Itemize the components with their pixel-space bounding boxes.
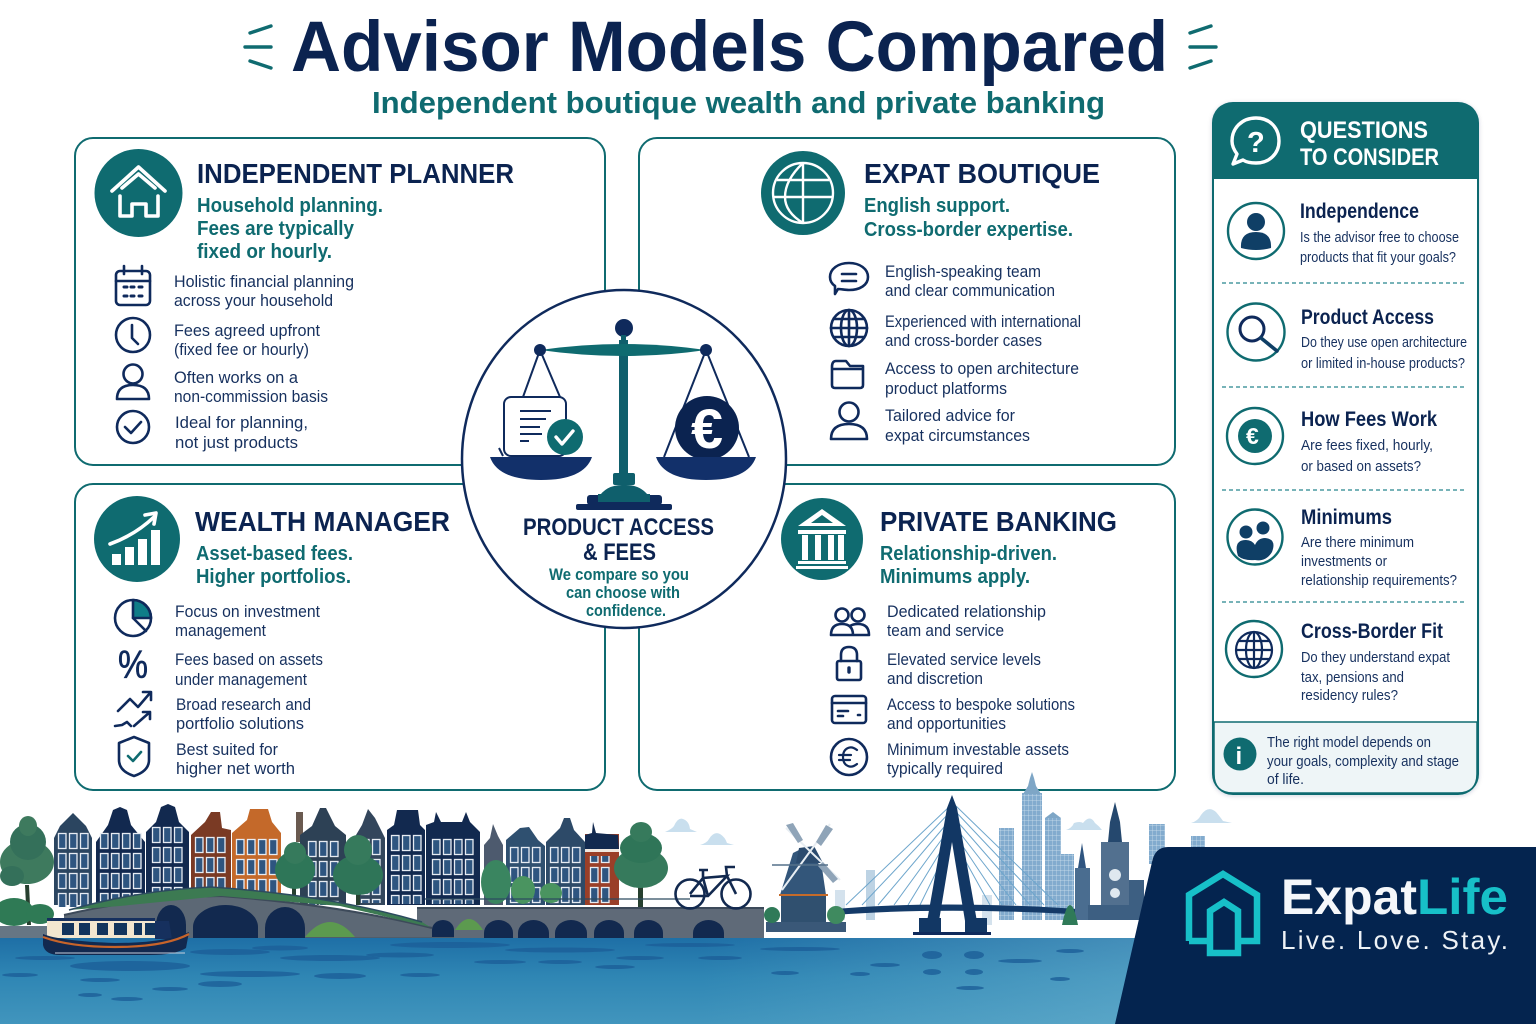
summary — [196, 542, 353, 588]
summary: fixed or hourly. — [197, 240, 332, 263]
item text: and discretion — [887, 669, 983, 688]
question: independence: Is the advisor free to choose — [1300, 229, 1459, 246]
item text — [885, 406, 1030, 445]
summary: Minimums apply. — [880, 565, 1030, 588]
euro coin — [675, 396, 739, 460]
title decoration right — [1190, 26, 1216, 68]
summary: Asset-based fees. — [196, 542, 353, 565]
summary: Higher portfolios. — [196, 565, 351, 588]
panel: independent planner — [75, 138, 605, 465]
sidebar title: QUESTIONS — [1300, 117, 1428, 144]
sidebar title line two: TO CONSIDER — [1300, 144, 1439, 171]
icon: bank card — [832, 696, 866, 723]
item text: Minimum investable assets — [887, 740, 1069, 759]
item text — [885, 312, 1081, 350]
canal houses — [54, 804, 619, 908]
question mark: ? — [1247, 127, 1265, 159]
logo wordmark accent: Life — [1417, 869, 1508, 925]
panel: private banking — [639, 484, 1175, 790]
question: minimums: Minimums — [1301, 506, 1392, 529]
item text: expat circumstances — [885, 426, 1030, 445]
question: cross-border fit — [1226, 620, 1451, 704]
question: product access: Do they use open architecture — [1301, 334, 1467, 351]
logo wordmark: Expat — [1281, 869, 1417, 925]
summary: English support. — [864, 194, 1010, 217]
item text: Fees based on assets — [175, 650, 323, 669]
center heading line two: & FEES — [583, 539, 656, 566]
icon: clock — [116, 318, 150, 352]
item text — [887, 740, 1069, 778]
question: product access: Product Access — [1301, 306, 1434, 329]
title decoration left — [245, 26, 271, 68]
question: independence: products that fit your goals? — [1300, 249, 1456, 266]
item text: Experienced with international — [885, 312, 1081, 331]
item text: product platforms — [885, 379, 1007, 398]
tall tower spire overlapping card edge — [1023, 772, 1041, 794]
question: minimums: investments or — [1301, 553, 1387, 570]
item text: management — [175, 621, 266, 640]
item text: portfolio solutions — [176, 714, 304, 733]
item text: Tailored advice for — [885, 406, 1015, 425]
item text: typically required — [887, 759, 1003, 778]
center note — [549, 566, 689, 620]
item text: higher net worth — [176, 759, 295, 778]
distant city towers — [835, 793, 1205, 925]
question: how fees work: € — [1246, 423, 1259, 449]
item text — [887, 602, 1046, 640]
panel: expat boutique — [639, 138, 1175, 465]
item text — [176, 695, 311, 733]
question: independence — [1228, 200, 1459, 266]
logo panel — [1115, 847, 1536, 1024]
icon: pie chart — [115, 600, 151, 636]
stone arch bridge — [0, 887, 764, 942]
panel: questions to consider — [1213, 103, 1478, 794]
item text: and cross-border cases — [885, 331, 1042, 350]
clouds — [665, 809, 1232, 845]
heading: INDEPENDENT PLANNER — [197, 158, 514, 189]
item text — [174, 272, 354, 310]
icon: shield — [119, 737, 149, 776]
item text — [174, 321, 320, 359]
sidebar footer note — [1214, 722, 1477, 793]
bicycle — [676, 867, 750, 908]
item text — [175, 602, 320, 640]
icon: scales — [490, 319, 756, 510]
icon: percent: % — [118, 644, 148, 687]
question: product access — [1228, 304, 1467, 372]
item text: Often works on a — [174, 368, 299, 387]
item text: Access to open architecture — [885, 359, 1079, 378]
center note: confidence. — [586, 602, 666, 620]
sidebar footer note: your goals, complexity and stage — [1267, 753, 1459, 770]
center note: can choose with — [566, 584, 680, 602]
icon: euro — [831, 739, 867, 775]
canal boat — [43, 918, 189, 955]
question: how fees work: or based on assets? — [1301, 458, 1421, 475]
icon: calendar — [116, 266, 150, 305]
question: cross-border fit: residency rules? — [1301, 687, 1398, 704]
item text: English-speaking team — [885, 262, 1041, 281]
skyline illustration — [0, 793, 1536, 1024]
item text: Broad research and — [176, 695, 311, 714]
icon: growth chart — [94, 496, 180, 582]
item text — [176, 740, 295, 778]
question: cross-border fit: tax, pensions and — [1301, 669, 1404, 686]
question: independence: Independence — [1300, 200, 1419, 223]
item text: and clear communication — [885, 281, 1055, 300]
item text — [885, 262, 1055, 300]
icon: check — [117, 411, 149, 443]
icon: team — [831, 608, 869, 635]
sidebar footer note: i — [1236, 743, 1242, 770]
item text: Fees agreed upfront — [174, 321, 320, 340]
question: minimums — [1228, 506, 1457, 589]
item text: across your household — [174, 291, 333, 310]
icon: bank — [781, 498, 863, 580]
icon: person — [831, 402, 867, 439]
icon: folder — [832, 361, 863, 388]
icon: question bubble — [1232, 118, 1279, 164]
heading: PRIVATE BANKING — [880, 506, 1117, 537]
item text — [887, 695, 1075, 733]
question: minimums: relationship requirements? — [1301, 572, 1457, 589]
item text — [174, 368, 328, 406]
question: product access: or limited in-house products? — [1301, 355, 1465, 372]
center note: We compare so you — [549, 566, 689, 584]
question: how fees work: How Fees Work — [1301, 408, 1437, 431]
windmill — [764, 823, 846, 932]
icon: chat — [830, 263, 868, 294]
item text: under management — [175, 670, 307, 689]
sidebar footer note: of life. — [1267, 771, 1304, 788]
item text: (fixed fee or hourly) — [174, 340, 309, 359]
item text: Focus on investment — [175, 602, 320, 621]
icon: house — [94, 149, 182, 237]
tagline: Live. Love. Stay. — [1281, 925, 1508, 955]
church tower — [1062, 802, 1144, 925]
item text: Elevated service levels — [887, 650, 1041, 669]
icon: person — [117, 364, 149, 399]
logo icon: house — [1189, 874, 1257, 953]
item text: non-commission basis — [174, 387, 328, 406]
summary — [864, 194, 1073, 241]
item text: Ideal for planning, — [175, 413, 308, 432]
subtitle: Independent boutique wealth and private banking — [372, 85, 1105, 120]
heading: WEALTH MANAGER — [195, 506, 450, 537]
suspension bridge — [835, 795, 1105, 935]
summary: Fees are typically — [197, 217, 355, 240]
question: cross-border fit: Do they understand expat — [1301, 649, 1451, 666]
item text: Dedicated relationship — [887, 602, 1046, 621]
heading: EXPAT BOUTIQUE — [864, 158, 1100, 189]
icon: trend lines — [115, 692, 151, 726]
item text — [175, 413, 308, 452]
title: Advisor Models Compared — [291, 8, 1168, 87]
euro coin: € — [691, 397, 723, 460]
item text — [175, 650, 323, 689]
sidebar footer note: The right model depends on — [1267, 734, 1431, 751]
question: how fees work: Are fees fixed, hourly, — [1301, 437, 1433, 454]
summary: Household planning. — [197, 194, 383, 217]
question: cross-border fit: Cross-Border Fit — [1301, 620, 1443, 643]
item text — [885, 359, 1079, 398]
icon: globe — [831, 310, 867, 346]
item text — [887, 650, 1041, 688]
summary — [880, 542, 1057, 588]
question: minimums: Are there minimum — [1301, 534, 1414, 551]
icon: globe — [761, 151, 845, 235]
bridge cables — [846, 806, 1058, 905]
item text: and opportunities — [887, 714, 1006, 733]
water — [0, 938, 1536, 1024]
item text: team and service — [887, 621, 1004, 640]
panel: wealth manager — [75, 484, 605, 790]
item text: Holistic financial planning — [174, 272, 354, 291]
item text: Best suited for — [176, 740, 278, 759]
document — [504, 397, 583, 456]
center circle: product access and fees — [462, 290, 786, 628]
summary: Relationship-driven. — [880, 542, 1057, 565]
question: how fees work — [1227, 408, 1437, 475]
summary — [197, 194, 383, 263]
summary: Cross-border expertise. — [864, 218, 1073, 241]
item text: not just products — [175, 433, 298, 452]
trees — [0, 816, 668, 926]
sidebar header — [1213, 103, 1478, 179]
center heading: PRODUCT ACCESS — [523, 514, 714, 541]
item text: Access to bespoke solutions — [887, 695, 1075, 714]
icon: lock — [837, 647, 861, 680]
